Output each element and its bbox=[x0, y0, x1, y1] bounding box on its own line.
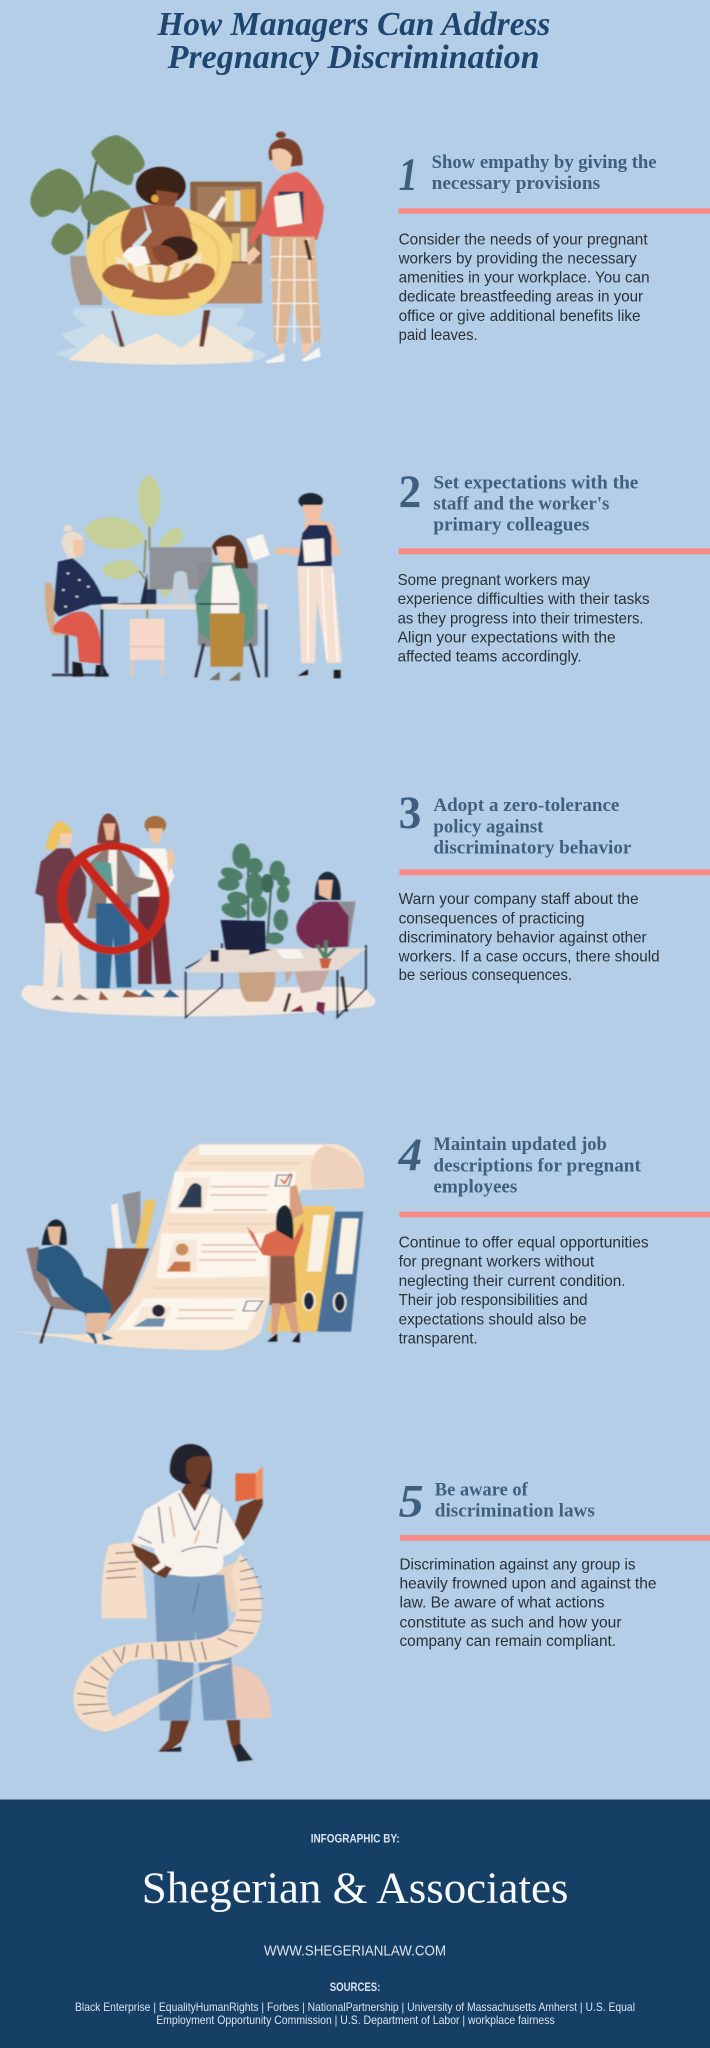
step 4 heading: descriptions for pregnant bbox=[433, 1156, 642, 1177]
illustration: office team at desk bbox=[45, 475, 342, 681]
step 2 body bbox=[398, 572, 650, 665]
step 5 heading: discrimination laws bbox=[435, 1501, 595, 1522]
step 4 heading bbox=[398, 1129, 642, 1198]
mother and baby bbox=[102, 167, 215, 300]
chair bbox=[86, 205, 233, 347]
step 3 body: discriminatory behavior against other bbox=[399, 929, 647, 946]
illustration: nursing mother and manager bbox=[30, 132, 324, 365]
step 4 heading: employees bbox=[433, 1177, 517, 1198]
step 4 body bbox=[399, 1234, 649, 1347]
step 5 body: law. Be aware of what actions bbox=[400, 1595, 604, 1612]
rug bbox=[54, 308, 267, 365]
step 5 heading: Be aware of bbox=[435, 1480, 528, 1501]
step 3 body: consequences of practicing bbox=[399, 910, 585, 927]
portraits on cards bbox=[132, 1177, 211, 1327]
step 2 body: as they progress into their trimesters. bbox=[398, 610, 644, 627]
illustration: woman reading with scroll bbox=[73, 1444, 272, 1762]
legs and sandals bbox=[154, 1575, 253, 1762]
step 1 body: workers by providing the necessary bbox=[398, 250, 637, 268]
step 4 body: Continue to offer equal opportunities bbox=[399, 1234, 649, 1251]
infographic by label: INFOGRAPHIC BY: bbox=[311, 1834, 400, 1846]
website: WWW.SHEGERIANLAW.COM bbox=[264, 1943, 446, 1960]
step 2 body: affected teams accordingly. bbox=[398, 648, 582, 665]
step 4 heading: 4 bbox=[398, 1129, 422, 1181]
front scroll bbox=[73, 1552, 263, 1732]
bookshelf bbox=[190, 182, 262, 303]
sources list: Employment Opportunity Commission | U.S. Department of Labor | workplace fairness bbox=[156, 2013, 555, 2027]
floor bbox=[21, 985, 375, 1016]
step 3 heading: Adopt a zero-tolerance bbox=[433, 795, 619, 816]
binders bbox=[267, 1206, 363, 1332]
illustration: job description scroll bbox=[11, 1144, 365, 1350]
sources label: SOURCES: bbox=[330, 1982, 380, 1994]
title bbox=[157, 6, 550, 76]
step 2 heading: primary colleagues bbox=[433, 515, 589, 536]
step 1 heading: 1 bbox=[399, 149, 418, 201]
step 5 body: Discrimination against any group is bbox=[400, 1556, 636, 1573]
plant and pot bbox=[218, 843, 290, 1002]
step 4 body: expectations should also be bbox=[399, 1311, 587, 1328]
step 5 body bbox=[400, 1556, 657, 1650]
footer panel bbox=[0, 1800, 710, 2048]
step 2 heading: staff and the worker's bbox=[433, 493, 609, 514]
middle woman bbox=[86, 813, 154, 1000]
desk organiser bbox=[102, 1191, 156, 1320]
step 4 body: neglecting their current condition. bbox=[399, 1273, 626, 1290]
step 3 body bbox=[398, 891, 660, 984]
step 2 body: experience difficulties with their tasks bbox=[398, 591, 650, 608]
desk and computer bbox=[102, 547, 267, 677]
seated pregnant worker bbox=[195, 535, 259, 681]
step 3 heading: 3 bbox=[399, 787, 421, 839]
step 2 body: Align your expectations with the bbox=[398, 629, 616, 646]
manager bbox=[245, 132, 324, 363]
step 1 heading: Show empathy by giving the bbox=[432, 152, 657, 173]
step 1 body: office or give additional benefits like bbox=[399, 308, 641, 325]
step 5 body: company can remain compliant. bbox=[400, 1633, 616, 1650]
seated pregnant woman bbox=[26, 1219, 113, 1343]
step 3 body: be serious consequences. bbox=[399, 967, 572, 984]
step 5 heading: 5 bbox=[399, 1476, 424, 1528]
step 1 body: Consider the needs of your pregnant bbox=[399, 231, 648, 248]
step 3 body: Warn your company staff about the bbox=[399, 891, 639, 908]
no symbol bbox=[62, 846, 164, 951]
sources list bbox=[75, 2000, 635, 2027]
step 1 body: paid leaves. bbox=[399, 327, 478, 344]
step 3 heading: discriminatory behavior bbox=[433, 837, 632, 858]
step 4 heading: Maintain updated job bbox=[433, 1134, 607, 1155]
step 4 body: for pregnant workers without bbox=[399, 1254, 595, 1271]
title: How Managers Can Address bbox=[157, 6, 550, 43]
step 3 body: workers. If a case occurs, there should bbox=[398, 949, 660, 966]
illustration: zero tolerance group and worker bbox=[21, 813, 375, 1017]
paper scroll bbox=[11, 1144, 365, 1350]
step 4 body: Their job responsibilities and bbox=[399, 1292, 588, 1309]
shirt and arms bbox=[131, 1466, 263, 1578]
desk and computer bbox=[186, 920, 366, 1017]
title: Pregnancy Discrimination bbox=[167, 39, 540, 76]
company name: Shegerian & Associates bbox=[142, 1864, 568, 1913]
plant bbox=[85, 475, 183, 618]
step 1 body: amenities in your workplace. You can bbox=[399, 270, 650, 287]
step 3 heading: policy against bbox=[433, 816, 544, 837]
step 5 body: constitute as such and how your bbox=[400, 1614, 622, 1631]
step 1 body bbox=[398, 231, 650, 344]
head bbox=[170, 1444, 212, 1489]
step 2 body: Some pregnant workers may bbox=[398, 572, 590, 589]
step 4 body: transparent. bbox=[399, 1330, 478, 1347]
plant bbox=[30, 135, 145, 305]
sources list: Black Enterprise | EqualityHumanRights | Forbes | NationalPartnership | University of Massachusetts Amherst | U.S. Equal bbox=[75, 2000, 635, 2014]
step 1 body: dedicate breastfeeding areas in your bbox=[399, 289, 644, 306]
step 1 heading: necessary provisions bbox=[432, 173, 600, 194]
step 3 heading bbox=[399, 787, 632, 858]
standing colleague bbox=[246, 493, 342, 678]
left woman bbox=[35, 821, 89, 1000]
step 5 body: heavily frowned upon and against the bbox=[400, 1575, 657, 1592]
right man bbox=[138, 816, 180, 997]
seated worker bbox=[283, 872, 356, 1015]
step 2 heading bbox=[399, 466, 638, 536]
standing woman writing bbox=[247, 1185, 303, 1343]
seated older woman bbox=[45, 525, 118, 677]
back scroll bbox=[101, 1542, 272, 1718]
step 2 heading: Set expectations with the bbox=[433, 472, 638, 493]
step 5 heading bbox=[399, 1476, 595, 1528]
step 2 heading: 2 bbox=[399, 466, 421, 518]
step 1 heading bbox=[399, 149, 657, 201]
